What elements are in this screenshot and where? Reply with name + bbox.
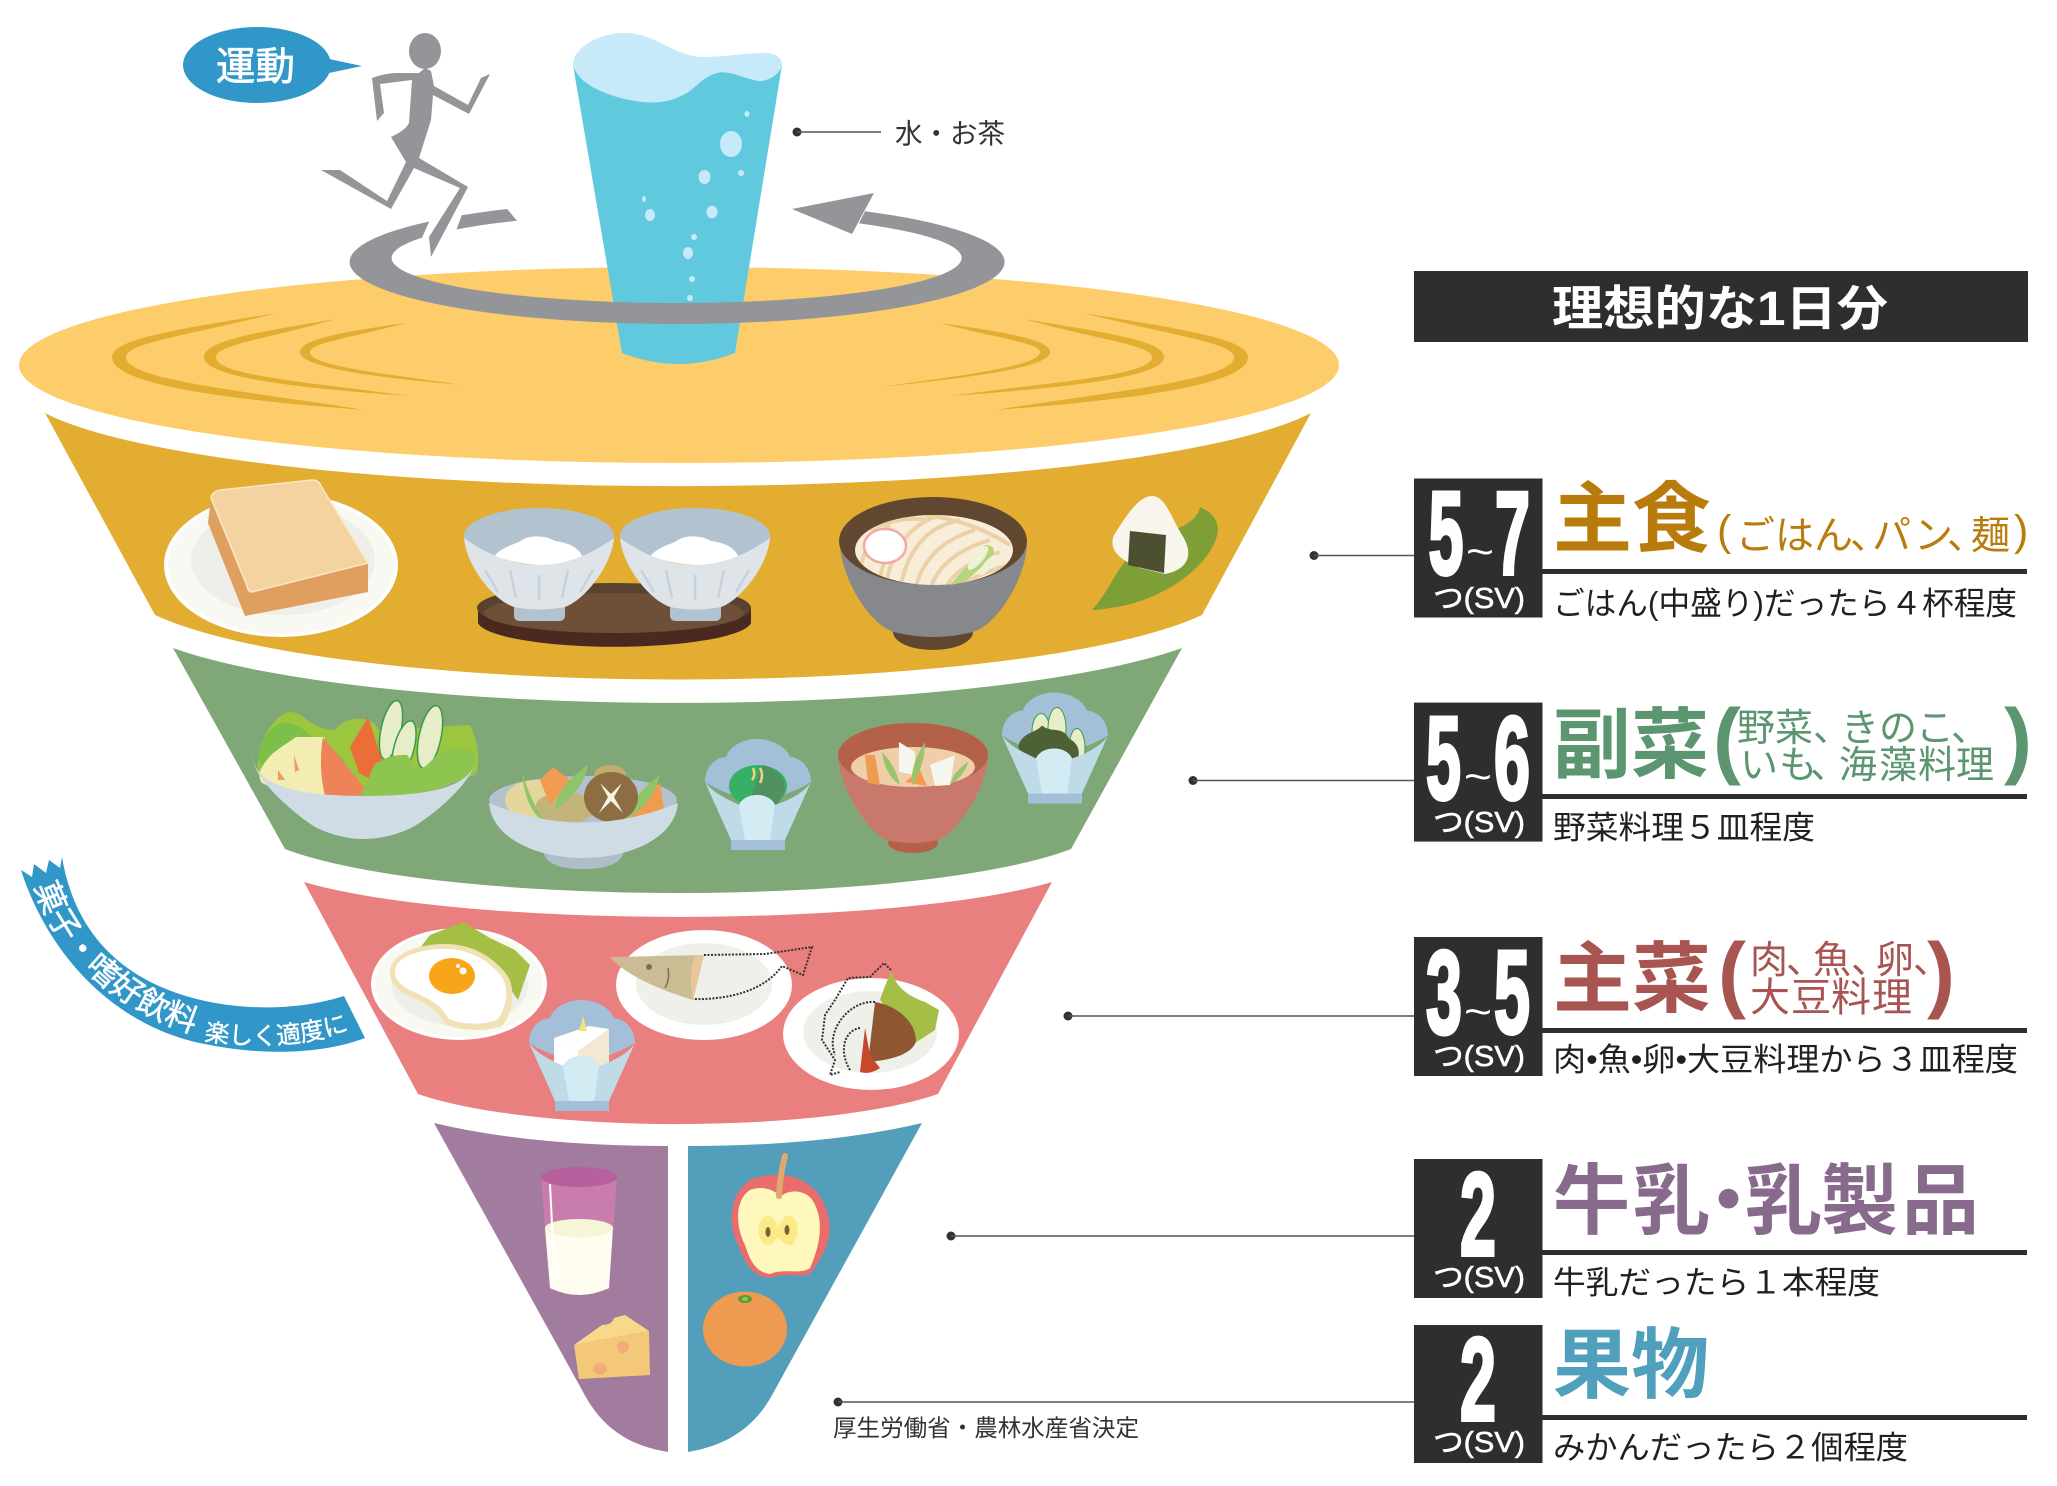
source note: 厚生労働省・農林水産省決定: [833, 1415, 1139, 1441]
panel: milk and dairy row: 2: [1460, 1149, 1496, 1281]
icon: miso soup bowl: [838, 723, 988, 853]
panel: staple foods row: 主食: [1553, 477, 1711, 563]
panel: staple foods row: ごはん、パン、麺: [1736, 515, 2010, 558]
panel: food pyramid: [19, 267, 1339, 1452]
panel: fruit row: つ(SV): [1433, 1427, 1525, 1459]
callout: exercise speech bubble: [183, 27, 362, 103]
panel: vegetable dishes row: 6: [1494, 693, 1530, 825]
tier: vegetable dishes band: [173, 648, 1182, 893]
panel: main dishes row: 肉、魚、卵、: [1750, 940, 1951, 982]
panel: vegetable dishes row: [1188, 692, 2032, 846]
panel: main dishes row: 肉•魚•卵•大豆料理から３皿程度: [1553, 1042, 2018, 1078]
icon: grilled fish plate: [610, 930, 812, 1040]
connector: [1310, 551, 1414, 560]
panel: vegetable dishes row: 野菜料理５皿程度: [1553, 810, 1815, 846]
connector: [834, 1398, 1414, 1406]
tier: main dishes band: [304, 882, 1052, 1124]
panel: staple foods row: 7: [1495, 468, 1530, 600]
panel: staple foods row: ごはん(中盛り)だったら４杯程度: [1553, 586, 2017, 622]
panel: staple foods row: つ(SV): [1433, 583, 1525, 615]
connector: [1064, 1012, 1414, 1020]
icon: runner: [321, 33, 490, 257]
panel: staple foods row: 5: [1428, 468, 1464, 600]
panel: vegetable dishes row: つ(SV): [1433, 807, 1525, 839]
tier: staple foods band: [45, 413, 1311, 679]
panel: fruit row: [834, 1314, 2027, 1466]
tier: milk and dairy wedge: [434, 1123, 668, 1452]
panel: right column header: 理想的な1日分: [1552, 283, 1888, 336]
icon: rice ball on leaf: [1092, 496, 1218, 610]
panel: vegetable dishes row: 野菜、きのこ、: [1737, 708, 1989, 750]
panel: vegetable dishes row: 5: [1426, 693, 1461, 825]
ribbon: snacks and beverages: [21, 857, 365, 1052]
panel: vegetable dishes row: ~: [1464, 753, 1492, 800]
label: water and tea: [792, 118, 1005, 149]
panel: main dishes row: 主菜: [1553, 937, 1711, 1023]
panel: vegetable dishes row: いも、海藻料理: [1740, 745, 1994, 787]
panel: vegetable dishes row: 副菜: [1553, 703, 1709, 789]
rice bowl right: [620, 508, 770, 621]
panel: staple foods row: [1310, 468, 2028, 622]
arrow: circular exercise arrow: [350, 193, 1005, 324]
panel: staple foods row: ~: [1466, 528, 1494, 575]
icon: tofu dish: [529, 1000, 635, 1111]
connector: [946, 1232, 1414, 1240]
panel: fruit row: 果物: [1553, 1323, 1709, 1409]
icon: apple half: [732, 1156, 830, 1278]
label: water and tea: 水・お茶: [895, 118, 1005, 149]
icon: noodle bowl: [839, 497, 1027, 650]
panel: main dishes row: 5: [1494, 927, 1530, 1059]
panel: vegetable dishes row: ): [2004, 692, 2032, 786]
icon: salad bowl: [252, 699, 478, 839]
panel: main dishes row: 3: [1426, 927, 1462, 1059]
panel: right column header: [1414, 271, 2028, 342]
connector: [1188, 776, 1414, 785]
ribbon: snacks and beverages: 菓子・嗜好飲料: [32, 878, 198, 1034]
panel: milk and dairy row: つ(SV): [1433, 1262, 1525, 1294]
panel: milk and dairy row: [946, 1149, 2027, 1300]
icon: rice bowls on tray: [464, 508, 770, 647]
icon: glass of water: [573, 33, 782, 364]
icon: small spinach dish: [705, 739, 811, 850]
panel: vegetable dishes row: (: [1713, 692, 1741, 786]
icon: simmered vegetables bowl: [489, 765, 678, 869]
icon: small seaweed dish: [1002, 692, 1108, 804]
icon: fried egg plate: [371, 922, 547, 1040]
panel: main dishes row: ~: [1464, 988, 1492, 1035]
ribbon: snacks and beverages: 楽しく適度に: [204, 1015, 347, 1046]
panel: main dishes row: [1064, 926, 2027, 1078]
icon: cheese wedge: [574, 1315, 650, 1379]
rice bowl left: [464, 508, 614, 621]
tier: water and tea disk: [19, 267, 1339, 463]
tier: fruit wedge: [688, 1123, 922, 1452]
panel: main dishes row: 大豆料理: [1750, 976, 1912, 1020]
icon: glass of milk: [541, 1167, 617, 1295]
panel: fruit row: 2: [1460, 1314, 1496, 1446]
callout: exercise speech bubble: 運動: [216, 46, 295, 89]
panel: main dishes row: ): [1927, 926, 1955, 1020]
panel: milk and dairy row: 牛乳だったら１本程度: [1553, 1264, 1880, 1300]
icon: mandarin orange: [703, 1292, 787, 1366]
panel: staple foods row: (: [1717, 507, 1732, 555]
panel: main dishes row: つ(SV): [1433, 1041, 1525, 1073]
panel: fruit row: みかんだったら２個程度: [1553, 1430, 1908, 1466]
icon: toast on plate: [164, 480, 398, 637]
panel: main dishes row: (: [1718, 926, 1746, 1020]
panel: milk and dairy row: 牛乳・乳製品: [1553, 1159, 1979, 1245]
panel: staple foods row: ): [2014, 507, 2028, 555]
icon: hamburger steak plate: [783, 963, 959, 1090]
